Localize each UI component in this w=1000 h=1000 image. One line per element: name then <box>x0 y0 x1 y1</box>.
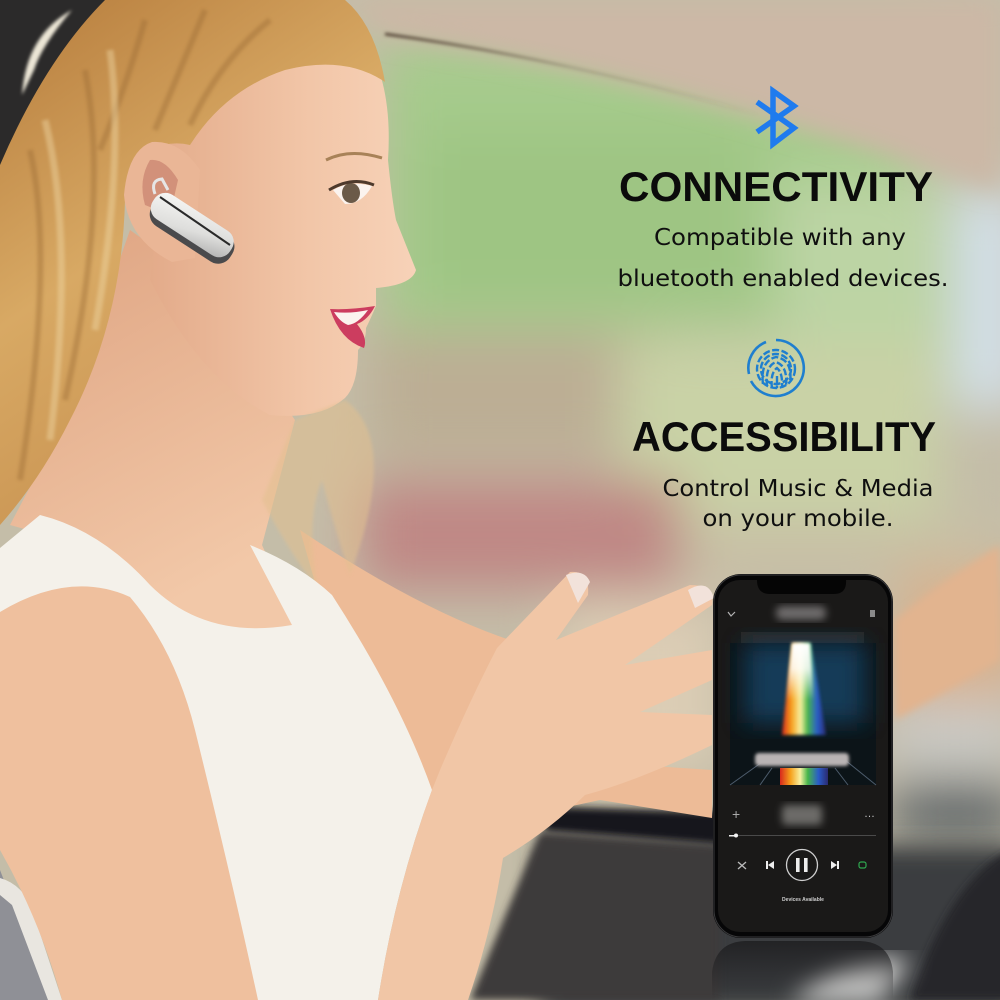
top bar <box>728 606 875 643</box>
album art <box>730 643 876 785</box>
near forearm and hand <box>378 572 712 1000</box>
undershirt strip <box>0 878 62 1000</box>
white top <box>0 515 432 1000</box>
icon: fingerprint <box>748 340 804 396</box>
track label <box>782 805 822 825</box>
phone reflection <box>712 941 893 1000</box>
devices available: Devices Available <box>782 897 824 903</box>
phone <box>713 574 893 938</box>
ear <box>124 142 200 262</box>
earpiece <box>144 179 240 269</box>
heading: connectivity: CONNECTIVITY <box>619 163 933 210</box>
text: accessibility description <box>662 476 934 532</box>
phone: … <box>864 808 875 820</box>
hair <box>0 0 385 525</box>
progress bar <box>729 834 876 838</box>
window glint <box>22 10 72 95</box>
loose strands near neck <box>262 400 374 590</box>
text: accessibility description: on your mobile. <box>702 506 894 532</box>
screen <box>718 580 888 932</box>
heading: accessibility: ACCESSIBILITY <box>632 413 936 460</box>
car pillar behind her <box>0 0 120 190</box>
add and more: + <box>732 806 740 822</box>
text: connectivity description: bluetooth enabled devices. <box>618 266 948 292</box>
fingernails <box>566 573 714 608</box>
far arm and wrist <box>300 530 712 830</box>
playback controls <box>738 850 866 880</box>
near arm and shoulder <box>0 586 258 1000</box>
notch <box>757 580 846 594</box>
neck and chest <box>10 230 300 632</box>
text: connectivity description <box>618 225 948 292</box>
text: accessibility description: Control Music & Media <box>662 476 934 502</box>
eye <box>333 184 372 204</box>
text: connectivity description: Compatible with any <box>654 225 906 251</box>
face <box>150 47 416 416</box>
icon: bluetooth <box>757 91 794 144</box>
seat <box>0 870 50 1000</box>
lips <box>330 306 375 348</box>
